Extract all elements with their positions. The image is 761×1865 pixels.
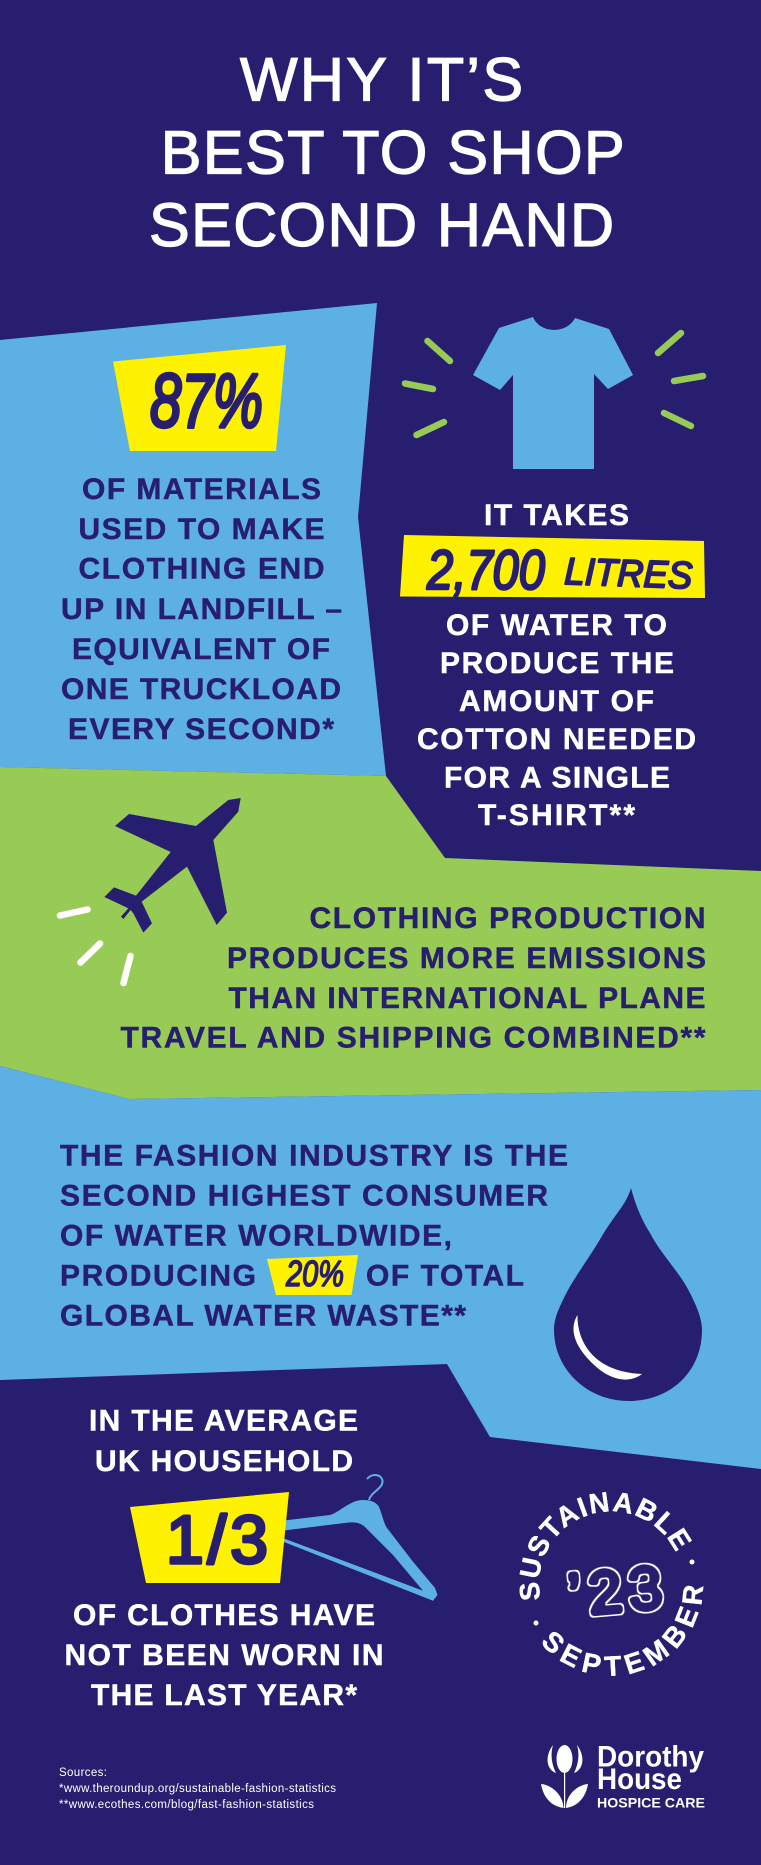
- text block: emissions: PRODUCES MORE EMISSIONS: [227, 942, 706, 975]
- text block: water for a t-shirt: IT TAKES: [484, 499, 629, 532]
- icon: t-shirt with green rays: [405, 317, 703, 469]
- badge: Sustainable September '23: SEPTEMBER: [542, 1586, 704, 1676]
- text: landfill statement: UP IN LANDFILL –: [61, 593, 342, 626]
- title: SECOND HAND: [149, 191, 614, 259]
- panel background: blue: [0, 303, 386, 776]
- text block: sources: *www.theroundup.org/sustainable-fashion-statistics: [59, 1783, 336, 1795]
- text block: unworn clothes: [64, 1405, 438, 1712]
- text block: water waste: [60, 1140, 568, 1333]
- text block: water waste: OF WATER WORLDWIDE,: [60, 1220, 452, 1253]
- text block: emissions: TRAVEL AND SHIPPING COMBINED**: [120, 1022, 706, 1055]
- text: landfill statement: CLOTHING END: [78, 552, 324, 586]
- callout: 1/3: 1/3: [166, 1502, 268, 1578]
- text block: unworn clothes: NOT BEEN WORN IN: [64, 1639, 384, 1672]
- icon: tulip: [541, 1745, 588, 1808]
- callout: 87%: [113, 345, 286, 451]
- icon: water drop: [554, 1188, 702, 1401]
- logo: Dorothy House Hospice Care: HOSPICE CARE: [597, 1795, 705, 1811]
- text block: sources: **www.ecothes.com/blog/fast-fashion-statistics: [59, 1799, 314, 1811]
- text block: unworn clothes: IN THE AVERAGE: [89, 1405, 358, 1438]
- callout: 1/3: [130, 1492, 289, 1583]
- callout: 87%: 87%: [150, 359, 263, 444]
- text: landfill statement: [61, 473, 342, 746]
- text block: sources: Sources:: [59, 1767, 107, 1779]
- title: BEST TO SHOP: [161, 118, 625, 186]
- panel: landfill statistic: [0, 303, 386, 776]
- text block: water waste: THE FASHION INDUSTRY IS THE: [60, 1140, 568, 1173]
- text block: unworn clothes: THE LAST YEAR*: [91, 1679, 357, 1712]
- text: landfill statement: EVERY SECOND*: [68, 713, 334, 746]
- text block: water waste: OF TOTAL: [366, 1260, 524, 1293]
- text: landfill statement: EQUIVALENT OF: [72, 633, 330, 666]
- callout: 2,700 litres: 2,700: [426, 538, 545, 601]
- text: landfill statement: USED TO MAKE: [78, 513, 324, 546]
- text block: emissions: [120, 902, 706, 1055]
- logo: Dorothy House Hospice Care: [541, 1741, 705, 1811]
- callout: 2,700 litres: LITRES: [564, 551, 693, 597]
- text block: sources: [59, 1767, 336, 1811]
- text block: emissions: CLOTHING PRODUCTION: [310, 902, 706, 935]
- title: WHY IT’S: [240, 46, 523, 114]
- panel: blue water band: [0, 1066, 761, 1469]
- text block: unworn clothes: UK HOUSEHOLD: [95, 1445, 353, 1478]
- text block: water waste: SECOND HIGHEST CONSUMER: [60, 1180, 548, 1213]
- text block: water for a t-shirt: PRODUCE THE: [440, 647, 674, 680]
- callout: 2,700 litres: [400, 535, 705, 601]
- text: landfill statement: ONE TRUCKLOAD: [61, 673, 341, 706]
- icon: plane with white trails: [60, 798, 241, 983]
- logo: Dorothy House Hospice Care: Dorothy: [597, 1741, 704, 1774]
- icon: coat hanger: [280, 1475, 438, 1601]
- text block: water for a t-shirt: [400, 499, 705, 832]
- text block: unworn clothes: OF CLOTHES HAVE: [73, 1599, 375, 1632]
- text block: water for a t-shirt: OF WATER TO: [446, 609, 667, 642]
- text block: water for a t-shirt: COTTON NEEDED: [417, 723, 696, 756]
- badge: Sustainable September '23: [520, 1492, 704, 1676]
- text block: emissions: THAN INTERNATIONAL PLANE: [228, 982, 706, 1015]
- logo: Dorothy House Hospice Care: House: [597, 1763, 682, 1796]
- title: [149, 46, 625, 259]
- text block: water for a t-shirt: AMOUNT OF: [459, 685, 654, 718]
- text block: water for a t-shirt: FOR A SINGLE: [444, 762, 670, 794]
- text block: water waste: GLOBAL WATER WASTE**: [60, 1300, 466, 1333]
- badge: Sustainable September '23: ’23: [565, 1554, 665, 1629]
- text: landfill statement: OF MATERIALS: [82, 473, 321, 506]
- badge: Sustainable September '23: SUSTAINABLE: [520, 1492, 692, 1600]
- callout: 20%: 20%: [285, 1253, 344, 1294]
- panel: green emissions band: [0, 767, 761, 1099]
- text block: water for a t-shirt: T-SHIRT**: [478, 799, 635, 832]
- text block: water waste: PRODUCING: [60, 1260, 256, 1293]
